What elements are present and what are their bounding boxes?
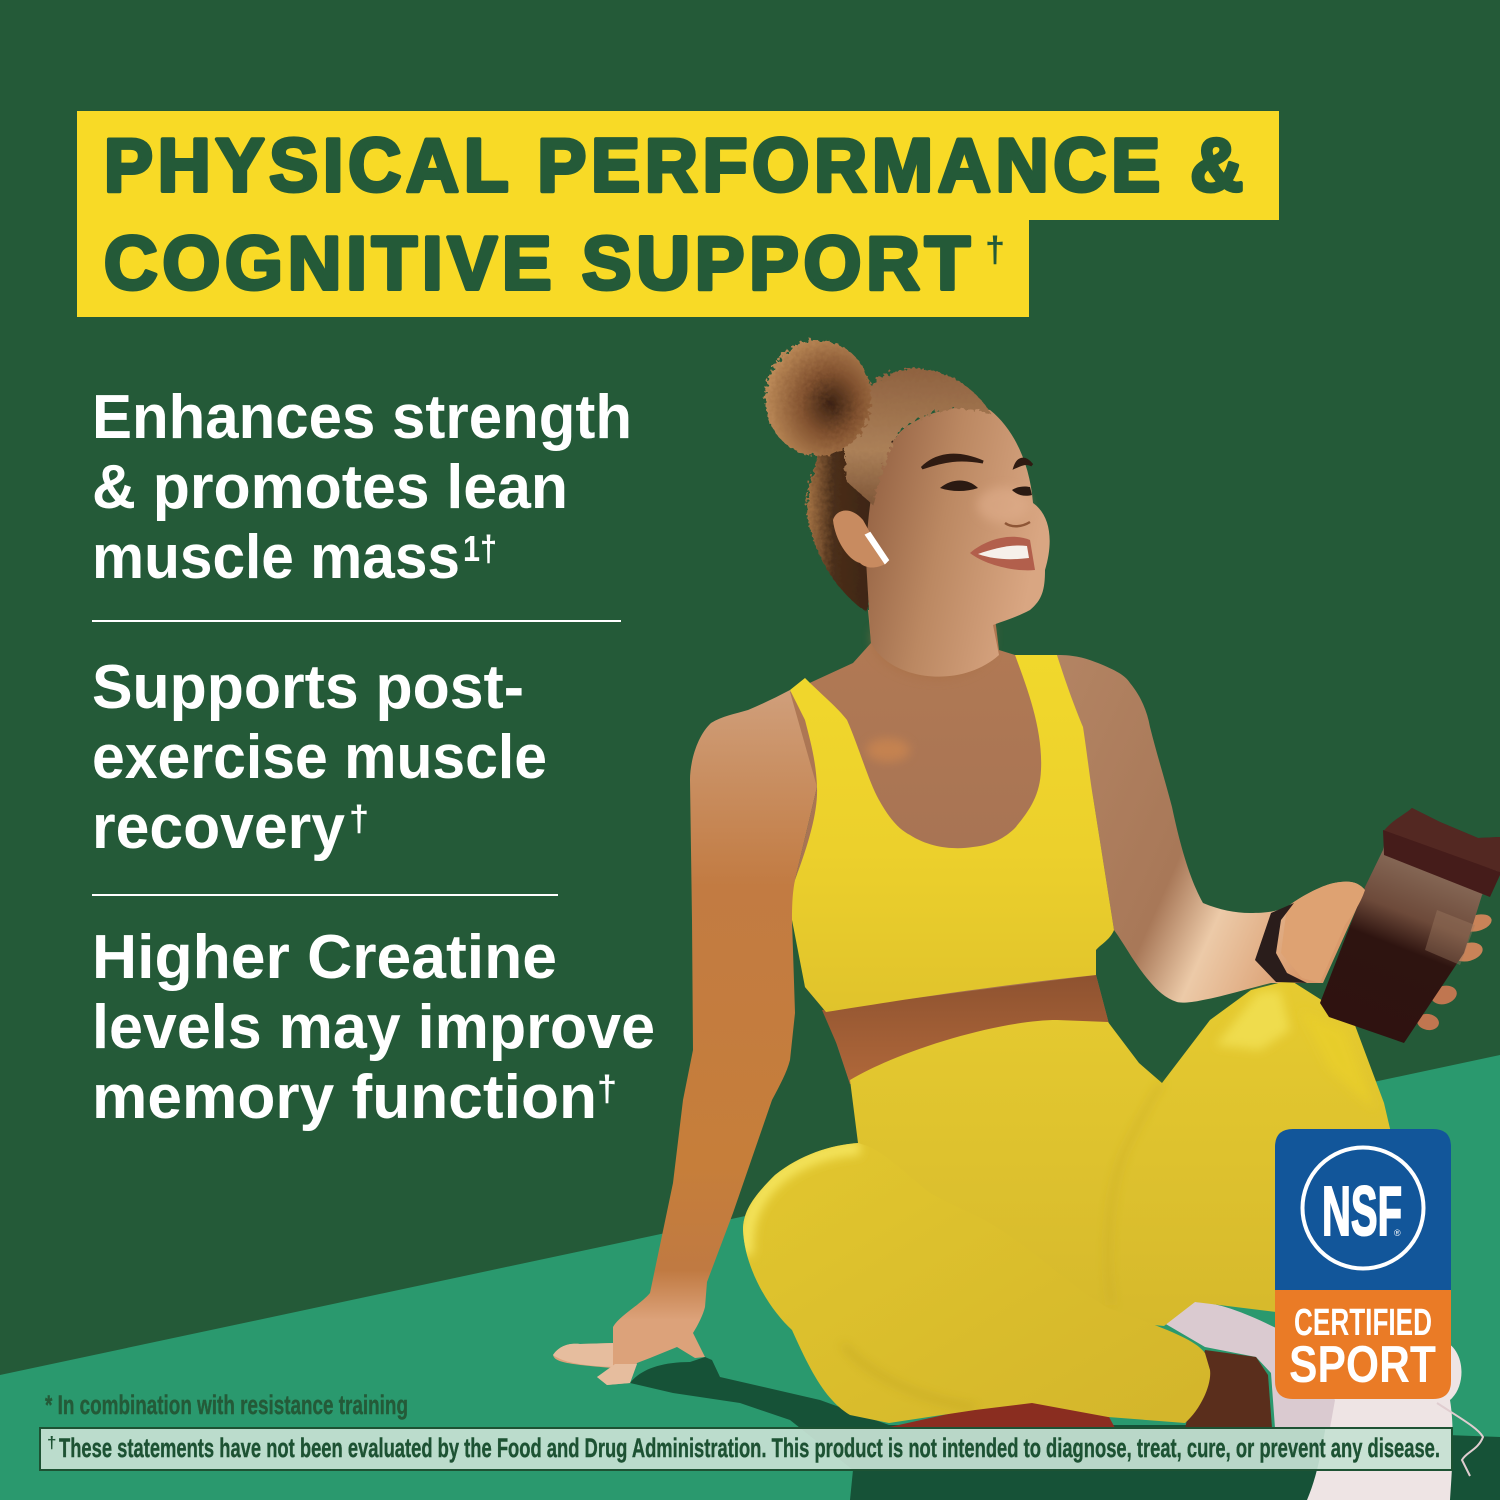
leg crease [1108,1083,1162,1305]
person shadow on floor [630,1357,1500,1500]
eyes [940,480,1032,496]
benefit 3 [92,923,655,1132]
NSF logotype: NSF [1322,1172,1402,1250]
benefit 2: † [349,798,369,839]
shaker lid band [1383,830,1500,897]
disclaimer dagger: † [47,1433,56,1452]
badge blue panel [1275,1129,1451,1290]
title line 2: COGNITIVE SUPPORT [104,221,975,305]
shoe laces [1437,1403,1483,1476]
thigh rim highlight [746,1148,860,1255]
benefit 2: recovery [92,793,345,862]
floor [0,1055,1500,1500]
knee highlight [1216,990,1290,1050]
far shoe [1164,1302,1335,1428]
supporting arm and hand [553,690,817,1385]
neck and torso skin [790,610,1114,1084]
title banner [77,111,1279,317]
watch [1255,903,1307,983]
cheek glow [977,487,1029,523]
thumb and fingertips [553,1343,637,1385]
shaker label [1425,910,1475,965]
benefit 1: Enhances strength [92,383,632,452]
collarbone glow [866,738,910,762]
ear [833,511,887,568]
leggings: waist and raised leg [850,980,1395,1326]
thigh underside crease [843,1345,975,1408]
NSF ring [1302,1148,1424,1268]
benefit 1: 1† [463,528,497,569]
white shoe [1307,1340,1461,1500]
benefit 3: Higher Creatine [92,923,557,992]
FDA disclaimer [40,1428,1452,1470]
divider 2 [92,894,558,896]
benefit 1: muscle mass [92,523,460,592]
divider 1 [92,620,621,622]
registered mark: ® [1394,1228,1401,1238]
shaker lid dome [1383,808,1500,872]
NSF Certified Sport badge [1275,1129,1451,1399]
benefit 1 [92,383,632,592]
eyebrows [922,455,1032,468]
red mat under leg [885,1400,1115,1428]
benefit list [92,383,655,1132]
midriff [822,975,1109,1084]
neck shadow [871,625,994,679]
photo: seated athlete [553,340,1500,1500]
nose shadow [1005,522,1030,526]
hair back [807,400,895,612]
face and neck skin [866,407,1050,677]
leggings: front thigh and calf [743,1143,1210,1423]
teeth [978,545,1029,559]
benefit 2: Supports post- [92,653,524,722]
title line 1: PHYSICAL PERFORMANCE & [104,123,1248,207]
shaker bottle [1320,808,1500,1043]
resistance training footnote: * In combination with resistance training [45,1390,408,1420]
sport label: SPORT [1289,1336,1436,1394]
title dagger: † [985,229,1005,270]
raised arm [1057,655,1365,1003]
banner background [77,111,1279,317]
hip highlight [1300,1010,1375,1110]
shaker fingers [1416,911,1494,1032]
hair bun [765,340,871,456]
benefit 2: exercise muscle [92,723,547,792]
thigh shading [743,1143,864,1259]
benefit 3: † [597,1068,617,1109]
yellow sports top [790,655,1114,1012]
benefit 3: levels may improve [92,993,655,1062]
badge orange panel [1275,1285,1451,1399]
benefit 3: memory function [92,1063,597,1132]
disclaimer box [40,1428,1452,1470]
lips [970,537,1035,570]
ankle [1185,1350,1272,1428]
crown hair [845,369,992,505]
earbud [866,533,888,563]
hand on bottle [1281,882,1365,983]
benefit 2 [92,653,547,862]
certified label: CERTIFIED [1294,1302,1432,1344]
benefit 1: & promotes lean [92,453,568,522]
